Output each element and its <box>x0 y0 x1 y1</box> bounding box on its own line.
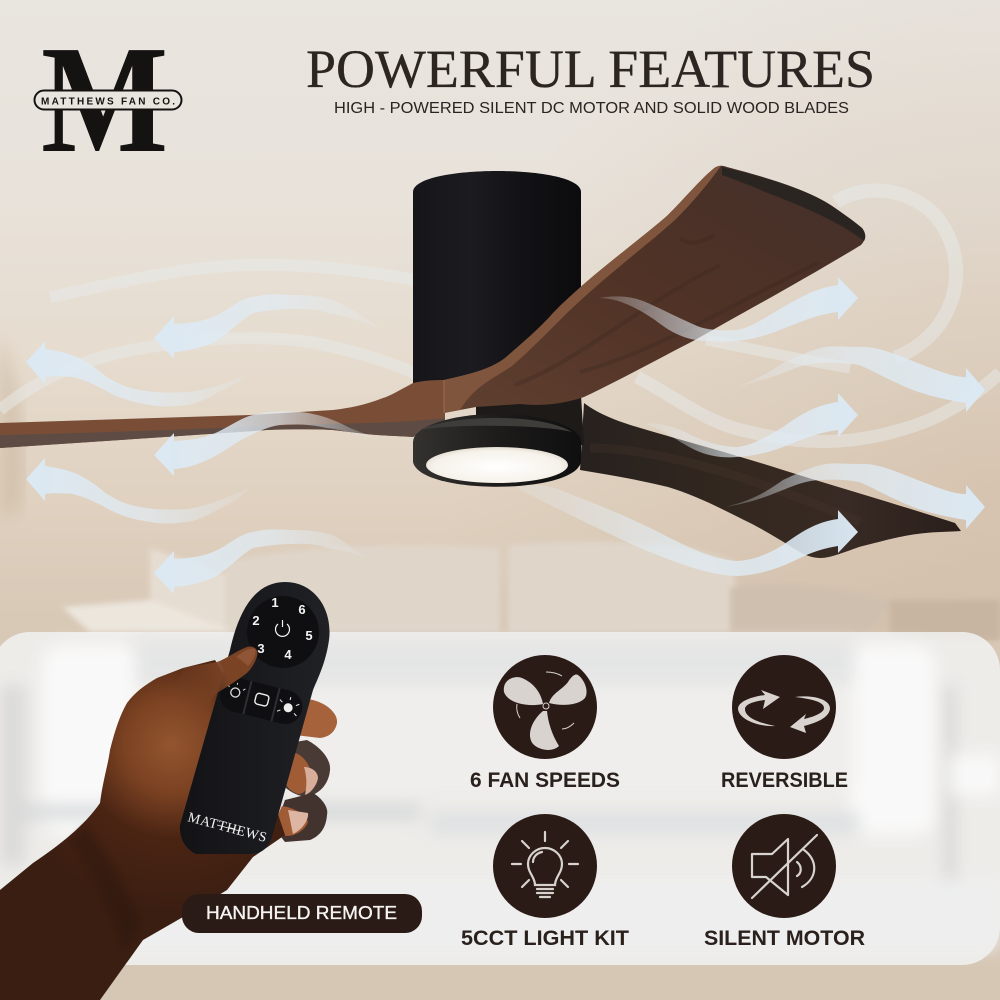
icon: light bulb <box>493 814 597 918</box>
remote body <box>180 582 330 854</box>
fan blade: lower right <box>580 403 961 558</box>
fan motor housing <box>413 171 581 405</box>
airflow arrow right 3 <box>645 393 858 457</box>
feature: 6 fan speeds <box>470 655 620 792</box>
logo letter M: M <box>41 15 168 185</box>
airflow arrow right 2 <box>737 346 985 412</box>
title: POWERFUL FEATURES <box>306 39 875 99</box>
airflow arrow left 2 <box>26 341 253 406</box>
airflow arrow left 5 <box>154 529 367 594</box>
handheld remote label <box>182 894 422 933</box>
translucent feature panel <box>0 632 1000 965</box>
function button pill <box>216 674 306 728</box>
feature: 5CCT light kit <box>461 814 629 950</box>
airflow arrow right 1 <box>599 277 858 342</box>
wrist shadow <box>70 825 140 950</box>
logo name pill <box>34 90 182 110</box>
airflow arrow left 4 <box>26 458 250 524</box>
hand holding remote <box>0 582 337 1000</box>
light kit canopy <box>413 414 581 487</box>
airflow wisps behind the fan <box>0 191 1000 442</box>
airflow arrow left 3 <box>154 411 380 476</box>
thumb tip highlight <box>236 649 256 666</box>
feature: silent motor <box>704 814 865 950</box>
remote brand text: MATTHEWS <box>186 810 268 846</box>
dial numbers and power symbol: 6 <box>298 602 306 617</box>
button dial <box>247 596 319 668</box>
subtitle: HIGH - POWERED SILENT DC MOTOR AND SOLID WOOD BLADES <box>334 100 849 117</box>
airflow arrow right 5 <box>515 485 858 576</box>
icon: muted speaker <box>732 814 836 918</box>
label: reversible: REVERSIBLE <box>721 769 848 792</box>
fan blade: upper right <box>444 166 865 413</box>
ceiling fan <box>0 166 961 558</box>
label: 5CCT light kit: 5CCT LIGHT KIT <box>461 927 629 950</box>
icon: rotation arrows <box>732 655 836 759</box>
label: 6 fan speeds: 6 FAN SPEEDS <box>470 769 620 792</box>
airflow arrows <box>26 277 985 594</box>
logo name pill: MATTHEWS FAN CO. <box>41 96 175 108</box>
dial numbers and power symbol: 5 <box>305 628 313 643</box>
remote control <box>180 582 330 854</box>
canopy neck <box>476 395 584 445</box>
LED light <box>426 447 568 483</box>
dial numbers and power symbol <box>252 595 313 662</box>
label: silent motor: SILENT MOTOR <box>704 927 865 950</box>
dial numbers and power symbol: 1 <box>271 595 279 610</box>
fingers <box>277 698 337 842</box>
airflow arrow right 4 <box>725 463 985 529</box>
icon: fan <box>493 655 597 759</box>
dial numbers and power symbol: 2 <box>252 613 260 628</box>
feature: reversible <box>721 655 848 792</box>
dial numbers and power symbol: 3 <box>257 641 265 656</box>
handheld remote label: HANDHELD REMOTE <box>206 902 397 923</box>
fan blade: left <box>0 380 445 448</box>
airflow arrow left 1 <box>154 294 380 359</box>
company logo <box>34 15 182 185</box>
dial numbers and power symbol: 4 <box>284 647 292 662</box>
thumb <box>170 647 257 722</box>
hand and forearm <box>0 660 285 1000</box>
